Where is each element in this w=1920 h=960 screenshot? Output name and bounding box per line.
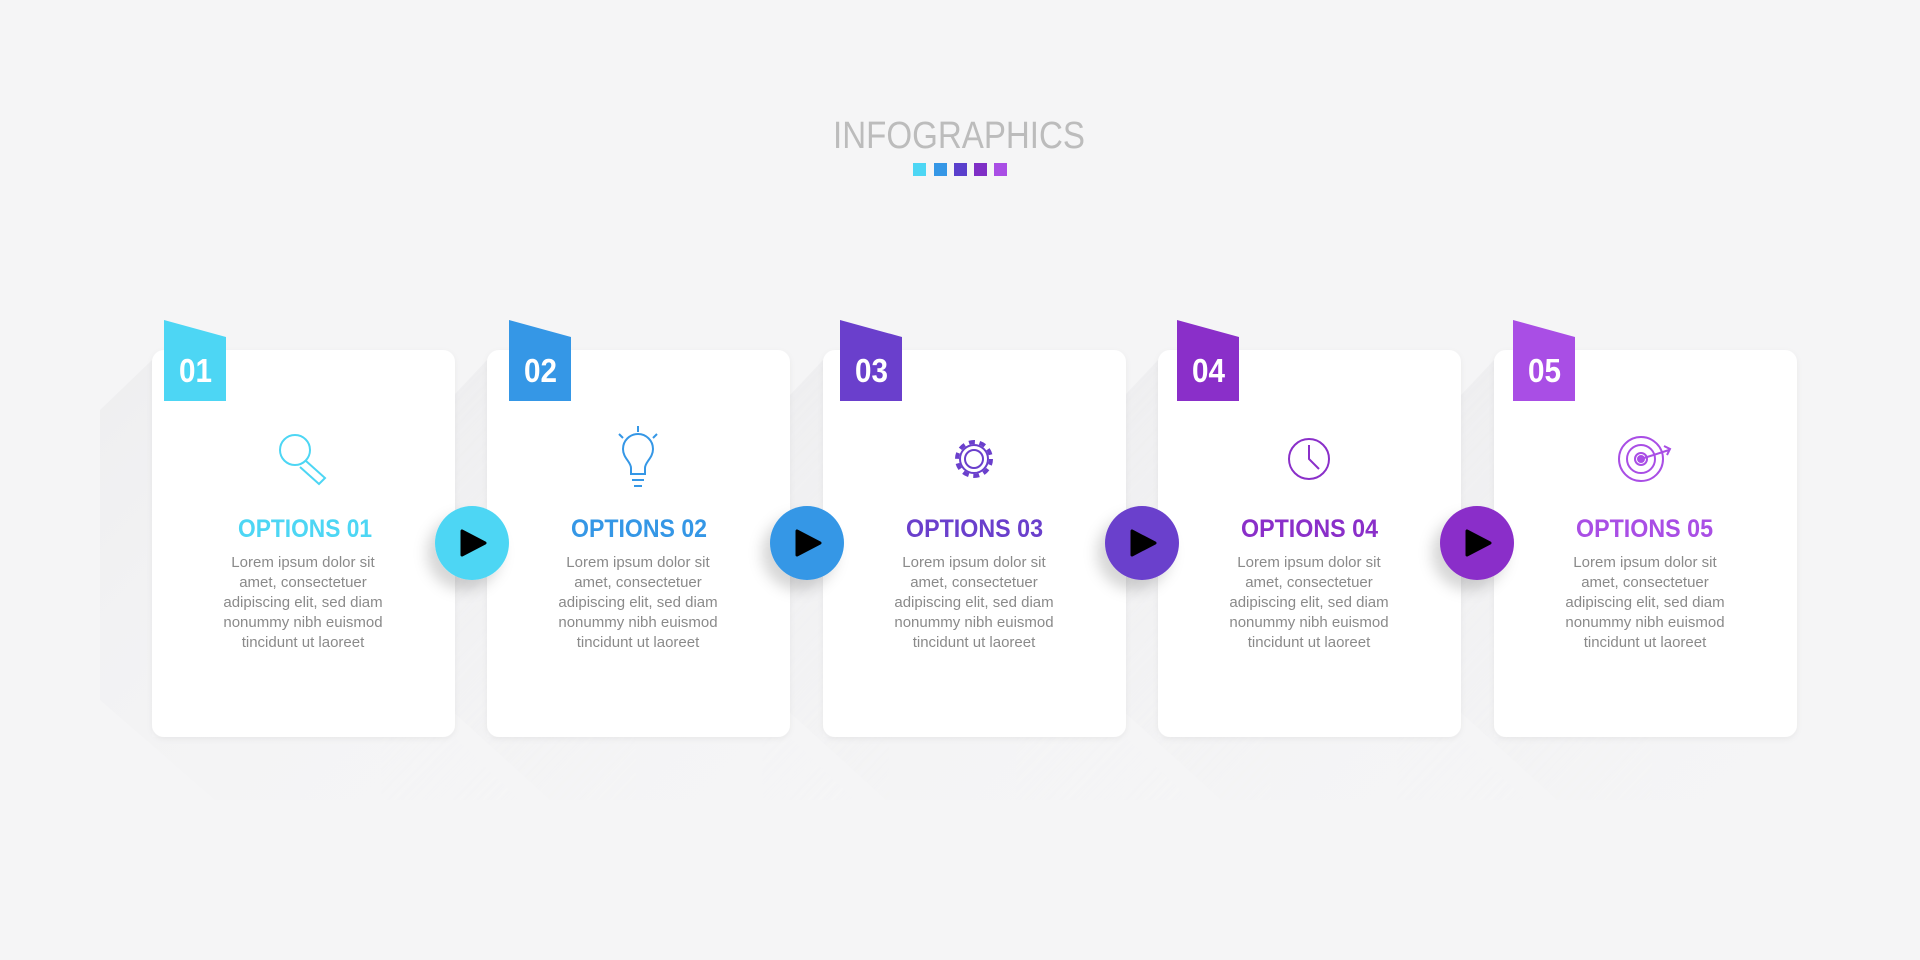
card 1: [152, 320, 455, 737]
text 02: tincidunt ut laoreet: [577, 634, 700, 651]
heading 02: OPTIONS 02: [571, 515, 707, 543]
text 03: Lorem ipsum dolor sit: [902, 554, 1047, 571]
text 03: [894, 554, 1054, 651]
text 03: adipiscing elit, sed diam: [894, 594, 1054, 611]
icon: target: [1619, 437, 1670, 481]
text 05: Lorem ipsum dolor sit: [1573, 554, 1718, 571]
text 02: Lorem ipsum dolor sit: [566, 554, 711, 571]
text 04: adipiscing elit, sed diam: [1229, 594, 1389, 611]
card 3: [823, 320, 1126, 737]
tag 04: [1177, 320, 1239, 401]
tag 03: [840, 320, 902, 401]
text 01: adipiscing elit, sed diam: [223, 594, 383, 611]
title: INFOGRAPHICS: [833, 115, 1085, 157]
text 05: [1565, 554, 1725, 651]
arrow 1: [435, 506, 509, 580]
text 02: [558, 554, 718, 651]
tag 02: [509, 320, 571, 401]
text 04: amet, consectetuer: [1245, 574, 1373, 591]
tag 05: [1513, 320, 1575, 401]
tag 01: [164, 320, 226, 401]
text 05: nonummy nibh euismod: [1565, 614, 1725, 631]
text 05: tincidunt ut laoreet: [1584, 634, 1707, 651]
text 01: tincidunt ut laoreet: [242, 634, 365, 651]
text 01: [223, 554, 383, 651]
card 5: [1494, 320, 1797, 737]
card 2: [487, 320, 790, 737]
arrow 2: [770, 506, 844, 580]
icon: bulb: [619, 426, 657, 486]
text 03: amet, consectetuer: [910, 574, 1038, 591]
text 03: tincidunt ut laoreet: [913, 634, 1036, 651]
text 05: adipiscing elit, sed diam: [1565, 594, 1725, 611]
text 02: amet, consectetuer: [574, 574, 702, 591]
heading 03: OPTIONS 03: [906, 515, 1043, 543]
text 03: nonummy nibh euismod: [894, 614, 1054, 631]
text 04: [1229, 554, 1389, 651]
text 02: adipiscing elit, sed diam: [558, 594, 718, 611]
text 04: nonummy nibh euismod: [1229, 614, 1389, 631]
tag 04: 04: [1192, 352, 1226, 389]
icon: magnifier: [280, 435, 325, 484]
text 04: tincidunt ut laoreet: [1248, 634, 1371, 651]
long shadows: [100, 360, 1862, 800]
text 01: nonummy nibh euismod: [223, 614, 383, 631]
tag 01: 01: [179, 352, 212, 389]
color squares: [913, 163, 1007, 176]
tag 05: 05: [1528, 352, 1561, 389]
icon: gear: [957, 442, 991, 476]
text 04: Lorem ipsum dolor sit: [1237, 554, 1382, 571]
text 05: amet, consectetuer: [1581, 574, 1709, 591]
text 02: nonummy nibh euismod: [558, 614, 718, 631]
heading 05: OPTIONS 05: [1576, 515, 1713, 543]
text 01: amet, consectetuer: [239, 574, 367, 591]
heading 01: OPTIONS 01: [238, 515, 372, 543]
text 01: Lorem ipsum dolor sit: [231, 554, 376, 571]
arrow 4: [1440, 506, 1514, 580]
icon: clock: [1289, 439, 1329, 479]
heading 04: OPTIONS 04: [1241, 515, 1378, 543]
card 4: [1158, 320, 1461, 737]
arrow 3: [1105, 506, 1179, 580]
tag 02: 02: [524, 352, 557, 389]
tag 03: 03: [855, 352, 888, 389]
